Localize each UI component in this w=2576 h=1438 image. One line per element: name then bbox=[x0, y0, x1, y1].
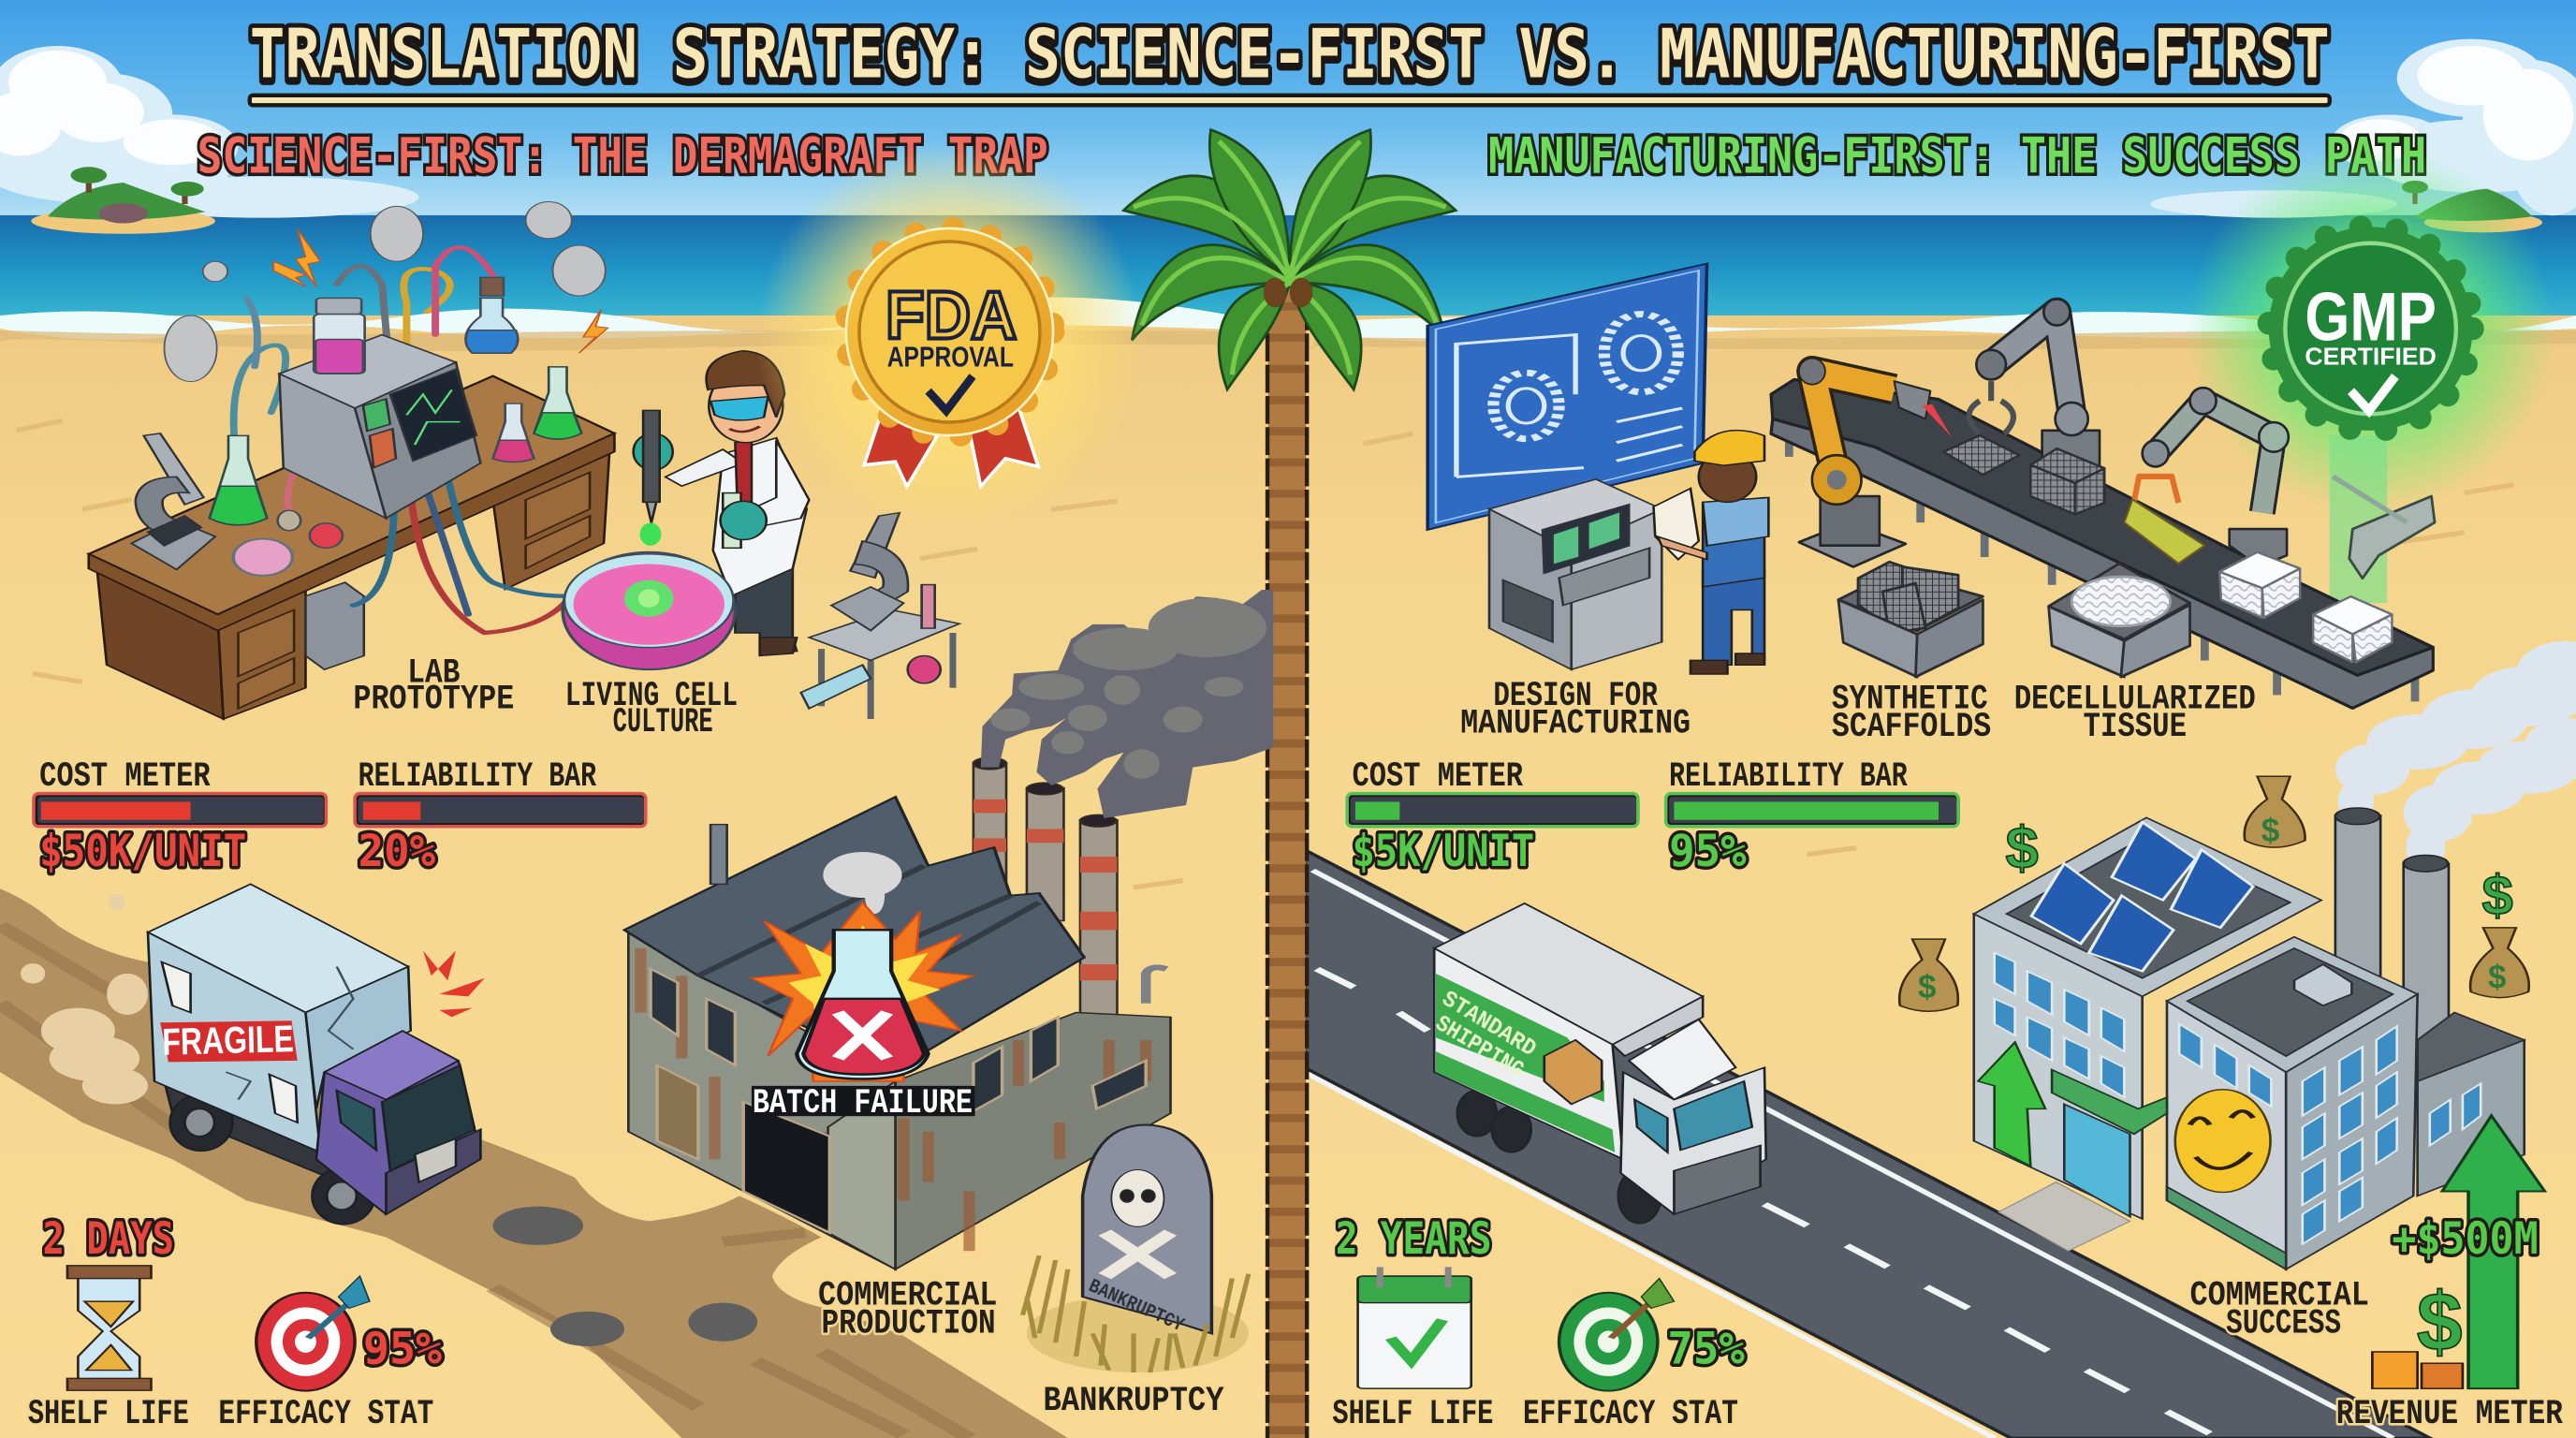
badge: FDA approval bbox=[755, 143, 1144, 531]
skull and crossbones bbox=[1105, 1170, 1171, 1276]
label: cost meter left: COST METER bbox=[39, 757, 211, 797]
white cab bbox=[1620, 1020, 1766, 1214]
island left bbox=[31, 167, 215, 234]
green entrance canopy bbox=[2052, 1070, 2167, 1134]
wooden desk bbox=[89, 376, 614, 719]
label: prototype: PROTOTYPE bbox=[353, 680, 514, 719]
stats bbox=[39, 826, 2539, 1375]
meter: right cost bbox=[1347, 794, 1638, 827]
windows bbox=[1995, 953, 2481, 1244]
panel: standard shipping truck bbox=[1434, 903, 1766, 1224]
gravestone bbox=[1083, 1124, 1211, 1333]
label: batch failure: BATCH FAILURE bbox=[753, 1084, 973, 1123]
blueprint bbox=[1427, 264, 1707, 530]
check mark bbox=[929, 376, 973, 411]
label: lab prototype: LAB bbox=[407, 653, 460, 693]
money and dollar icons: $ bbox=[1917, 970, 1937, 1007]
glass flasks and tubing bbox=[234, 247, 567, 633]
grey power supply under desk bbox=[305, 582, 364, 669]
money bags bbox=[1899, 776, 2529, 1011]
scanner arm bbox=[2333, 477, 2435, 579]
label: shelf life left: SHELF LIFE bbox=[28, 1395, 189, 1434]
purple cab bbox=[316, 1031, 480, 1214]
small petri dish bbox=[233, 539, 292, 576]
heading: science first: SCIENCE-FIRST: THE DERMAGRAFT TRAP bbox=[198, 127, 1048, 184]
label: living cell: LIVING CELL bbox=[565, 677, 738, 716]
stat: left reliability: 20% bbox=[359, 826, 436, 877]
island right bbox=[2402, 181, 2542, 232]
panel: production line bbox=[1771, 299, 2435, 708]
text on truck: standard shipping bbox=[1430, 987, 1540, 1084]
money and dollar icons: $ bbox=[2261, 814, 2280, 852]
conveyor legs bbox=[1789, 431, 2415, 701]
palm tree divider bbox=[1123, 130, 1456, 1438]
text on truck: fragile: FRAGILE bbox=[162, 1017, 294, 1064]
panel: design station bbox=[1427, 264, 1768, 674]
label: culture: CULTURE bbox=[613, 703, 713, 742]
roof vent bbox=[710, 825, 727, 884]
label: reliability left: RELIABILITY BAR bbox=[359, 757, 597, 797]
worker with clipboard bbox=[1654, 431, 1768, 674]
factory smoke bbox=[981, 590, 1273, 818]
panel: successful factory bbox=[1899, 641, 2576, 1388]
white steam bbox=[2335, 641, 2576, 871]
stat: left efficacy: 95% bbox=[363, 1324, 443, 1375]
conveyor belt bbox=[1771, 379, 2433, 708]
flask smoke bbox=[823, 852, 902, 914]
pink reagent jar bbox=[314, 298, 365, 374]
stat: right shelf life: 2 YEARS bbox=[1336, 1213, 1492, 1265]
pink flask bbox=[493, 404, 534, 462]
icon: calendar bbox=[1358, 1267, 1471, 1388]
label: efficacy left: EFFICACY STAT bbox=[218, 1395, 433, 1434]
icon: target left bbox=[256, 1276, 370, 1391]
panel: lab prototype bench bbox=[89, 202, 614, 719]
low block bbox=[2418, 1012, 2525, 1196]
label: efficacy right: EFFICACY STAT bbox=[1523, 1395, 1738, 1434]
lightning sparks bbox=[273, 229, 607, 353]
icon: target right bbox=[1559, 1279, 1674, 1391]
heading: manufacturing first: MANUFACTURING-FIRST: THE SUCCESS PATH bbox=[1488, 127, 2426, 184]
parcel bbox=[1544, 1040, 1602, 1104]
scientist bbox=[634, 351, 809, 655]
smoke puffs bbox=[165, 202, 606, 382]
label: design for: DESIGN FOR bbox=[1493, 677, 1659, 716]
label: tissue: TISSUE bbox=[2083, 708, 2187, 747]
dry grass base bbox=[1027, 1295, 1249, 1372]
broken flask with X bbox=[797, 930, 929, 1079]
label: shelf life right: SHELF LIFE bbox=[1332, 1395, 1493, 1434]
label: synthetic: SYNTHETIC bbox=[1832, 680, 1988, 719]
GMP wordmark: GMP bbox=[2305, 277, 2437, 355]
stat: left cost: $50K/UNIT bbox=[39, 826, 246, 877]
icon: hourglass bbox=[67, 1266, 151, 1390]
stat: right efficacy: 75% bbox=[1667, 1324, 1745, 1375]
blue flask bbox=[466, 277, 518, 353]
asphalt road, right bbox=[1305, 850, 2430, 1438]
spilled round flask bbox=[278, 510, 343, 548]
batch failure plate bbox=[752, 1086, 975, 1116]
panel: fragile truck bbox=[148, 884, 485, 1225]
clouds and islands, left bbox=[0, 46, 419, 234]
finished tissue stacks bbox=[2219, 552, 2392, 662]
factory rust streaks bbox=[640, 948, 1146, 1251]
damage spark marks bbox=[423, 950, 485, 1017]
meter: right reliability bbox=[1666, 794, 1958, 827]
green droplet bbox=[640, 522, 661, 546]
label: decellularized: DECELLULARIZED bbox=[2014, 680, 2256, 719]
panel: scientist and cell culture bbox=[563, 351, 959, 719]
yellow robot arm bbox=[1799, 359, 1952, 566]
meter: left reliability bbox=[355, 794, 646, 827]
solar panels bbox=[2031, 822, 2253, 971]
front block bbox=[2167, 937, 2418, 1269]
label: manufacturing: MANUFACTURING bbox=[1460, 705, 1690, 744]
standard word: STANDARD bbox=[1437, 987, 1540, 1063]
cargo box bbox=[1434, 903, 1703, 1159]
badge: GMP certified bbox=[2187, 144, 2554, 603]
FDA wordmark: FDA bbox=[886, 279, 1017, 354]
fragile label bbox=[160, 1020, 298, 1062]
small green arrow bbox=[1978, 1042, 2045, 1167]
label: bankruptcy: BANKRUPTCY bbox=[1043, 1382, 1224, 1421]
explosion bbox=[752, 902, 973, 1081]
panel: lab machine and glassware bbox=[131, 277, 581, 576]
crate decellularized tissue bbox=[2049, 564, 2190, 677]
label: reliability right: RELIABILITY BAR bbox=[1669, 757, 1908, 797]
revenue bars bbox=[2372, 1352, 2463, 1388]
factory windows and door bbox=[651, 969, 1146, 1233]
clouds and island, right bbox=[2150, 39, 2576, 232]
cracks bbox=[226, 967, 353, 1100]
stat: right cost: $5K/UNIT bbox=[1352, 826, 1534, 877]
big revenue arrow bbox=[2442, 1116, 2545, 1388]
check mark bbox=[2351, 376, 2395, 411]
stat: right reliability: 95% bbox=[1669, 826, 1747, 877]
label: tombstone bankruptcy: BANKRUPTCY bbox=[1085, 1275, 1187, 1337]
side vent pipe bbox=[1146, 967, 1166, 1004]
panel: bad factory bbox=[624, 757, 1249, 1372]
walkway bbox=[1998, 1182, 2130, 1251]
label: commercial success: COMMERCIAL bbox=[2190, 1276, 2369, 1315]
labels bbox=[28, 653, 2564, 1434]
certified word: CERTIFIED bbox=[2305, 343, 2437, 371]
cargo box bbox=[148, 884, 411, 1152]
main block bbox=[1974, 817, 2321, 1219]
money and dollar icons: $ bbox=[2004, 818, 2040, 886]
title underline bbox=[250, 95, 2330, 105]
title: TRANSLATION STRATEGY: SCIENCE-FIRST VS. MANUFACTURING-FIRST bbox=[250, 14, 2330, 93]
factory roof bbox=[624, 797, 1084, 1070]
glass entrance bbox=[2064, 1104, 2130, 1216]
label: success: SUCCESS bbox=[2226, 1304, 2341, 1343]
green flask right bbox=[534, 367, 581, 439]
label: scaffolds: SCAFFOLDS bbox=[1832, 708, 1991, 747]
side table with microscope bbox=[801, 513, 959, 719]
label: cost meter right: COST METER bbox=[1352, 757, 1524, 797]
chimneys bbox=[973, 757, 1117, 1031]
second robot arm bbox=[2124, 388, 2289, 566]
petri dish with culture bbox=[563, 552, 735, 669]
crate synthetic scaffolds bbox=[1838, 562, 1983, 677]
smiley sign bbox=[2175, 1090, 2271, 1193]
label: commercial production: COMMERCIAL bbox=[818, 1276, 997, 1315]
grey robot arm bbox=[1969, 299, 2100, 470]
stat: left shelf life: 2 DAYS bbox=[43, 1213, 174, 1265]
dry grass blades bbox=[1023, 1255, 1249, 1372]
control machine bbox=[1489, 479, 1661, 669]
meter: left cost bbox=[34, 794, 326, 827]
factory walls bbox=[628, 932, 1171, 1269]
money and dollar icons: $ bbox=[2487, 961, 2507, 998]
shipping word: SHIPPING bbox=[1430, 1012, 1528, 1084]
label: production: PRODUCTION bbox=[822, 1304, 996, 1343]
chimneys bbox=[2335, 808, 2449, 1063]
mesh scaffold samples on belt bbox=[1943, 435, 2104, 514]
stat: revenue: +$500M bbox=[2392, 1213, 2539, 1265]
money and dollar icons bbox=[1917, 814, 2514, 1374]
desk microscope bbox=[131, 433, 215, 569]
approval word: APPROVAL bbox=[887, 340, 1014, 373]
dirt road, left bbox=[0, 888, 1068, 1438]
money and dollar icons: $ bbox=[2415, 1282, 2465, 1374]
machine bbox=[279, 335, 480, 519]
money and dollar icons: $ bbox=[2481, 867, 2514, 931]
green flask left bbox=[210, 435, 267, 525]
